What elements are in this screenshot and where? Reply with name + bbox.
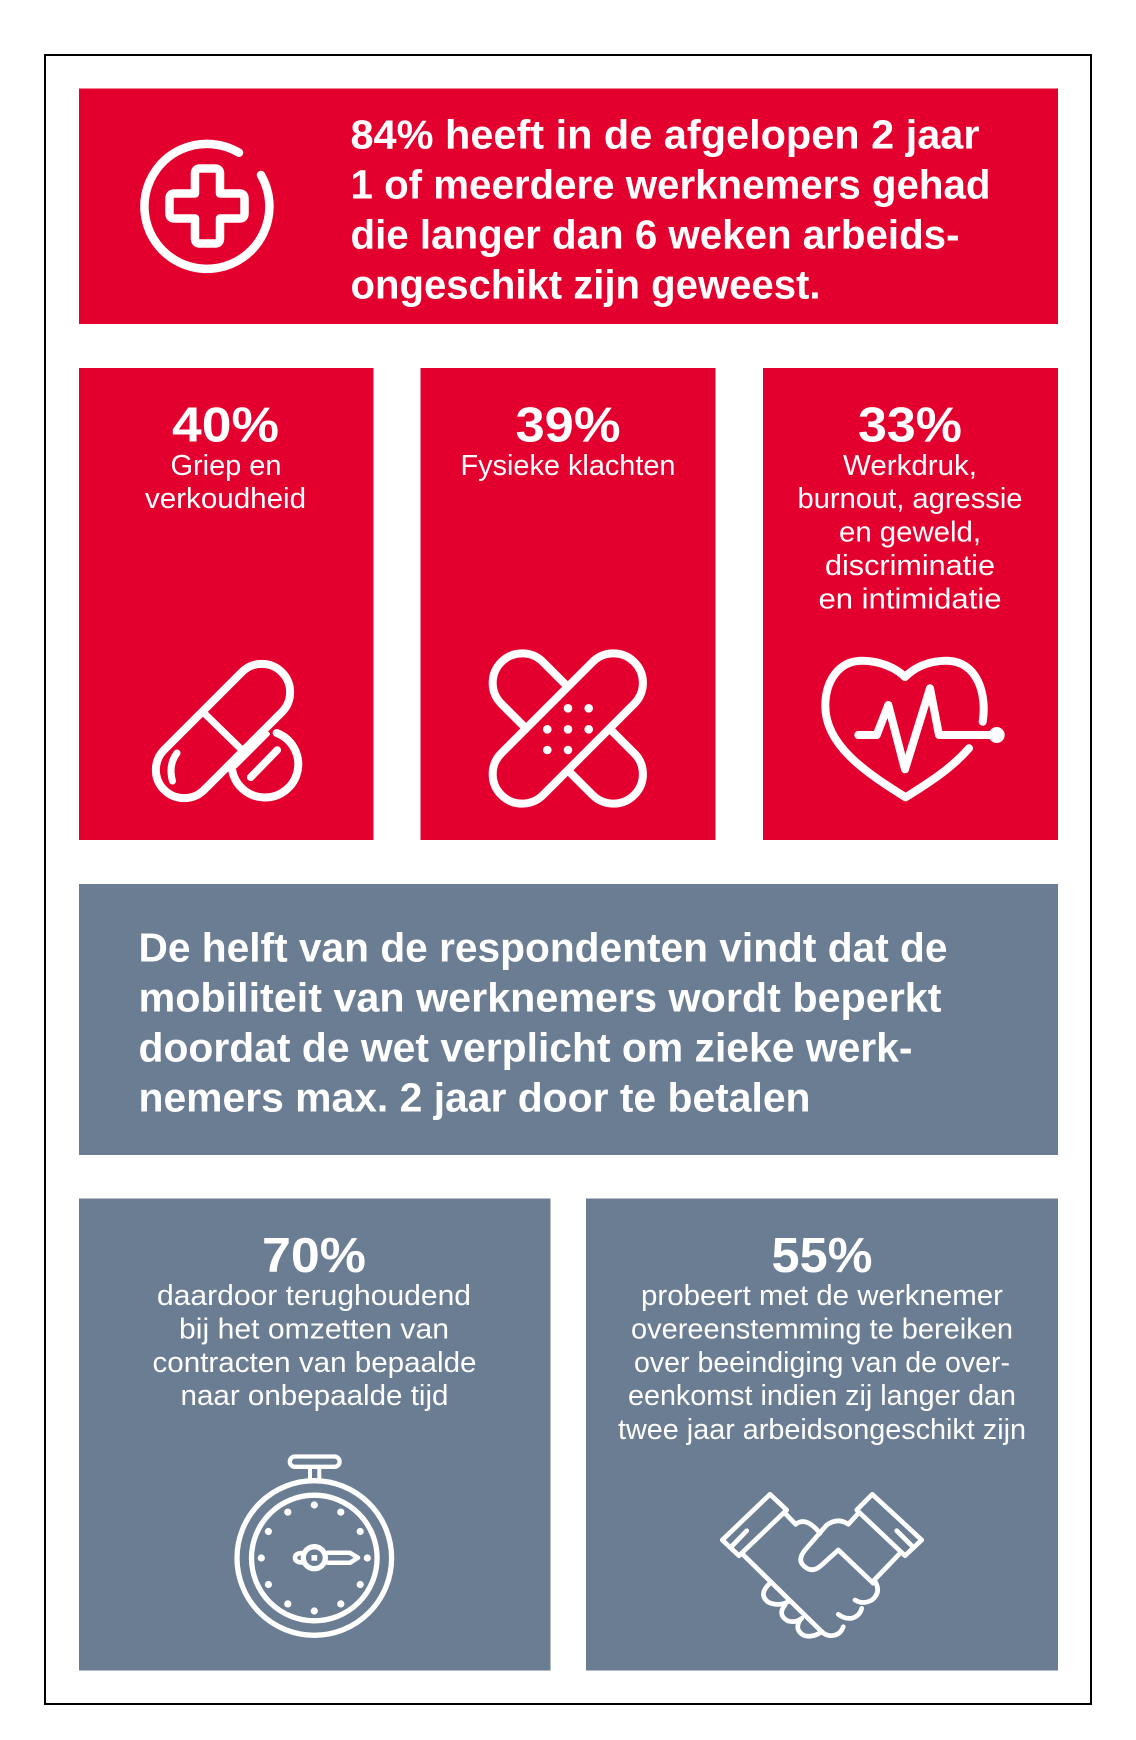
heading: mobiliteit statement: nemers max. 2 jaar door te betalen: [138, 1074, 810, 1120]
stat: 39% fysieke klachten: [460, 398, 676, 482]
stat: 39% fysieke klachten: 39%: [516, 398, 620, 452]
stat: 40% griep en verkoudheid: 40%: [172, 398, 279, 452]
stat: 55%: probeert met de werknemer: [641, 1280, 1003, 1312]
stat: 55%: [618, 1229, 1026, 1446]
stat: 70%: naar onbepaalde tijd: [180, 1380, 448, 1412]
heading: mobiliteit statement: De helft van de respondenten vindt dat de: [138, 924, 948, 970]
stat: 39% fysieke klachten: Fysieke klachten: [460, 450, 676, 482]
icon: medical cross in circle: [144, 144, 269, 269]
heading: 84% statement: 1 of meerdere werknemers gehad: [350, 162, 990, 208]
icon: pills: [144, 652, 302, 810]
panel: 70% terughoudend: [79, 1198, 550, 1670]
stat: 33% werkdruk: 33%: [858, 398, 962, 452]
heading: mobiliteit statement: mobiliteit van werknemers wordt beperkt: [138, 974, 942, 1020]
panel: werkdruk: [763, 368, 1058, 840]
stat: 55%: 55%: [772, 1229, 872, 1283]
panel: mobiliteit statement: [79, 884, 1058, 1155]
stat: 70%: 70%: [262, 1229, 366, 1283]
stat: 70%: [152, 1229, 476, 1412]
panel: fysieke klachten: [420, 368, 716, 840]
stat: 33% werkdruk: Werkdruk,: [843, 450, 977, 482]
heading: 84% statement: [350, 112, 990, 308]
stat: 40% griep en verkoudheid: Griep en: [170, 450, 282, 482]
icon: crossed plasters: [480, 641, 655, 816]
stat: 40% griep en verkoudheid: [145, 398, 306, 515]
icon: stopwatch: [237, 1456, 392, 1635]
stat: 55%: overeenstemming te bereiken: [631, 1314, 1013, 1346]
stat: 55%: twee jaar arbeidsongeschikt zijn: [618, 1414, 1026, 1446]
heading: mobiliteit statement: doordat de wet verplicht om zieke werk-: [138, 1024, 912, 1070]
stat: 33% werkdruk: [798, 398, 1022, 616]
stat: 70%: contracten van bepaalde: [152, 1347, 476, 1379]
heading: 84% statement: ongeschikt zijn geweest.: [350, 262, 820, 308]
panel: griep en verkoudheid: [79, 368, 374, 840]
stat: 55%: over beeindiging van de over-: [634, 1347, 1010, 1379]
heading: 84% statement: 84% heeft in de afgelopen 2 jaar: [350, 112, 980, 158]
icon: handshake: [722, 1494, 922, 1636]
icon: heart with pulse: [825, 661, 1005, 797]
stat: 33% werkdruk: burnout, agressie: [798, 483, 1022, 515]
panel: 55% overeenstemming: [586, 1198, 1058, 1670]
stat: 40% griep en verkoudheid: verkoudheid: [145, 483, 306, 515]
heading: 84% statement: die langer dan 6 weken arbeids-: [350, 212, 960, 258]
stat: 33% werkdruk: en geweld,: [839, 516, 981, 548]
panel: 84% headline: [79, 88, 1058, 324]
stat: 55%: eenkomst indien zij langer dan: [628, 1380, 1016, 1412]
heading: mobiliteit statement: [138, 924, 948, 1120]
stat: 70%: daardoor terughoudend: [157, 1280, 471, 1312]
stat: 70%: bij het omzetten van: [179, 1314, 449, 1346]
stat: 33% werkdruk: en intimidatie: [818, 584, 1002, 616]
stat: 33% werkdruk: discriminatie: [825, 550, 995, 582]
